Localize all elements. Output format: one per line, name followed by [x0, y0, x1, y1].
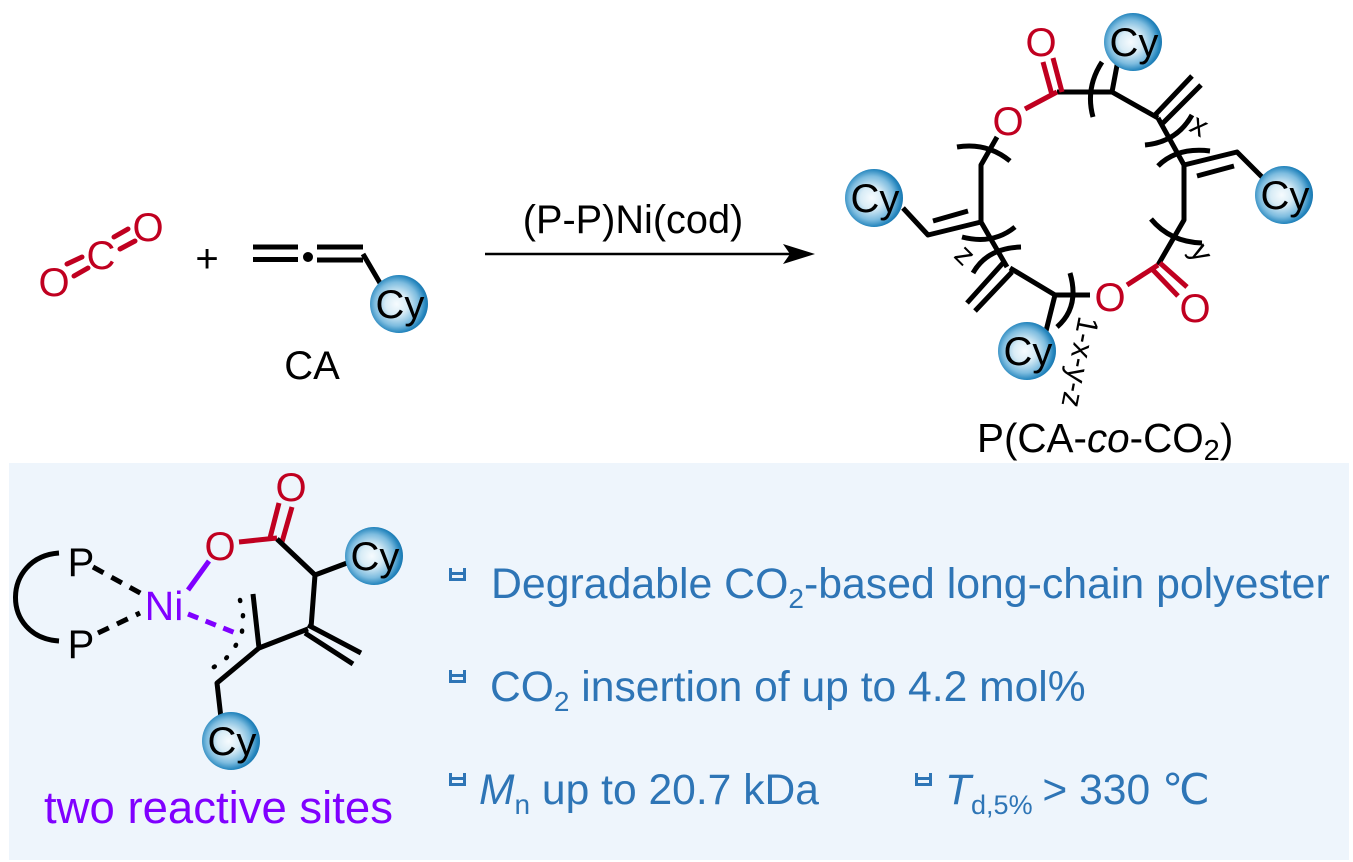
- label: P(CA-co-CO2): ): [1220, 415, 1233, 461]
- bullet: degradable polyester: Degradable CO: [491, 560, 788, 608]
- molecule: nickel intermediate with two reactive sites: Cy: [351, 535, 399, 579]
- label: P(CA-co-CO2): 2: [1204, 435, 1220, 467]
- cyclohexyl groups: Cy: [1110, 21, 1158, 65]
- cyclohexyl groups: Cy: [1261, 174, 1309, 218]
- bullet: CO2 insertion: insertion of up to 4.2 mol%: [569, 663, 1086, 711]
- oxygen atoms: O: [1025, 21, 1057, 65]
- oxygen atoms: [992, 21, 1211, 331]
- molecule: carbon dioxide: [38, 206, 164, 305]
- ester bonds: [1025, 58, 1187, 296]
- label: two reactive sites: two reactive sites: [44, 782, 393, 833]
- bullet: decomposition temperature: > 330 ℃: [1031, 766, 1210, 814]
- bullet: decomposition temperature: T: [945, 766, 974, 814]
- molecule: CA allene monomer: Cy: [376, 283, 424, 327]
- molecule: nickel intermediate with two reactive sites: O: [204, 525, 236, 569]
- diphosphine ligand: [15, 553, 59, 641]
- nickel centre and bonds: Ni: [145, 583, 183, 629]
- bullet: degradable polyester: [449, 560, 1330, 614]
- molecule: nickel intermediate with two reactive sites: P: [68, 623, 94, 667]
- subscript labels: x: [1185, 108, 1214, 144]
- molecule: nickel intermediate with two reactive sites: O: [275, 466, 307, 510]
- molecule: nickel intermediate with two reactive sites: Cy: [208, 720, 256, 764]
- plus sign: +: [195, 237, 219, 281]
- subscript labels: z: [948, 238, 982, 272]
- carboxylate: [239, 503, 292, 542]
- label: P(CA-co-CO2): P(CA-co-CO: [977, 415, 1204, 461]
- subscript labels: y: [1183, 238, 1219, 267]
- bullet: molecular weight: n: [514, 789, 530, 820]
- oxygen atoms: O: [1179, 287, 1211, 331]
- bullet: molecular weight: [449, 766, 819, 820]
- molecule: carbon dioxide: C: [87, 234, 115, 278]
- panel: summary background: [9, 463, 1349, 860]
- cyclohexyl groups: [345, 527, 403, 585]
- oxygen atoms: O: [992, 100, 1024, 144]
- bullet: decomposition temperature: d,5%: [971, 790, 1033, 820]
- carbon chain: [217, 539, 361, 718]
- bullet: CO2 insertion: 2: [554, 686, 569, 717]
- molecule: nickel intermediate with two reactive sites: P: [68, 541, 94, 585]
- allyl dotted bond: [209, 600, 243, 670]
- molecule: carbon dioxide: O: [38, 261, 70, 305]
- molecule: carbon dioxide: O: [132, 206, 164, 250]
- bullet: decomposition temperature: [915, 766, 1210, 820]
- molecule: polymer P(CA-co-CO2): [845, 13, 1313, 410]
- bullet: CO2 insertion: CO: [490, 663, 554, 711]
- reaction arrow with catalyst: (P-P)Ni(cod): [523, 198, 743, 242]
- bullet: molecular weight: up to 20.7 kDa: [530, 766, 819, 814]
- subscript labels: 1-x-y-z: [1055, 314, 1104, 410]
- reaction arrow with catalyst: [485, 198, 815, 264]
- cyclohexyl groups: Cy: [1004, 330, 1052, 374]
- molecule: nickel intermediate with two reactive sites: [15, 466, 403, 770]
- bullet: degradable polyester: -based long-chain polyester: [804, 560, 1330, 608]
- cyclohexyl groups: [845, 13, 1313, 380]
- bullet: molecular weight: M: [479, 766, 515, 814]
- oxygen atoms: O: [1094, 276, 1126, 320]
- polymer backbone bonds: [903, 60, 1262, 335]
- repeat unit brackets: [957, 62, 1210, 327]
- bullet: degradable polyester: 2: [788, 583, 804, 614]
- subscript labels: [948, 108, 1219, 410]
- molecule: CA allene monomer: [253, 247, 428, 333]
- cyclohexyl groups: Cy: [851, 177, 899, 221]
- label: CA: CA: [284, 344, 340, 388]
